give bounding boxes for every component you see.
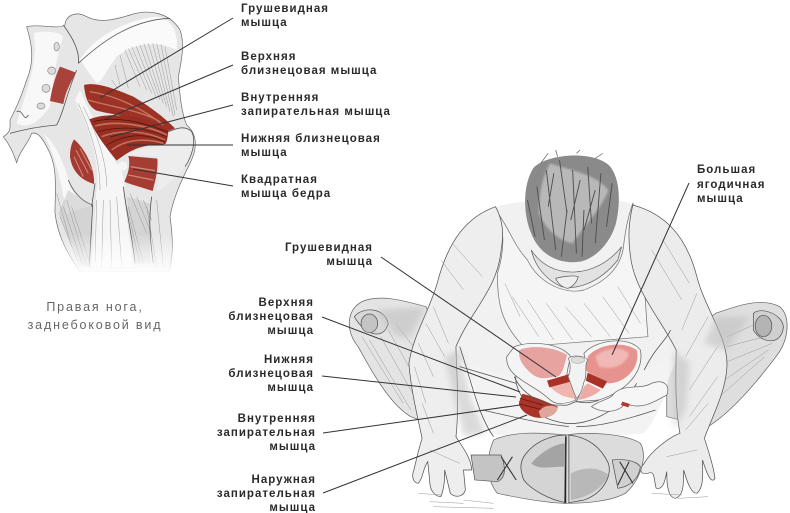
label: internal obturator, seated: запирательная	[217, 427, 316, 439]
caption	[28, 300, 162, 332]
label: quadratus femoris: мышца бедра	[241, 188, 331, 200]
label: internal obturator	[241, 92, 391, 118]
label: inferior gemellus: мышца	[241, 147, 288, 159]
label: internal obturator: Внутренняя	[241, 92, 319, 104]
muscle: lower pelvic fans	[550, 382, 576, 398]
gluteal hatching	[112, 43, 177, 117]
label: inferior gemellus, seated: Нижняя	[264, 354, 314, 366]
label: internal obturator, seated: Внутренняя	[238, 413, 316, 425]
bone: femur head	[127, 128, 194, 192]
leader lines: seated figure	[322, 183, 689, 493]
label: gluteus maximus: ягодичная	[697, 179, 766, 191]
sacrum and ilium light planes	[80, 17, 177, 83]
soft pencil shading	[377, 307, 750, 437]
crossed feet	[488, 433, 643, 503]
muscle: piriformis bands	[547, 374, 571, 387]
hair	[525, 156, 619, 262]
label: external obturator, seated	[217, 474, 316, 513]
muscle: gluteus and piriformis pelvis	[507, 341, 668, 418]
lap and waist	[471, 357, 669, 437]
label: superior gemellus: близнецовая мышца	[241, 65, 377, 77]
label: inferior gemellus	[241, 133, 381, 159]
sacral foramina	[37, 42, 59, 109]
caption: Правая нога,	[46, 300, 144, 314]
label: superior gemellus, seated: мышца	[267, 325, 314, 337]
muscle: left gluteus	[519, 347, 567, 378]
neck shadow	[531, 247, 622, 287]
fade	[50, 233, 183, 274]
label: superior gemellus, seated	[228, 297, 314, 337]
muscle: small right tendon	[621, 402, 630, 407]
muscle: piriformis	[84, 84, 175, 132]
tank top	[495, 203, 648, 347]
hip joint shape	[591, 382, 668, 411]
muscle: obturator blob	[519, 394, 558, 418]
leader lines: right leg view	[100, 18, 233, 186]
label: inferior gemellus, seated	[228, 354, 314, 394]
tendon sheet	[75, 90, 133, 267]
right arm	[629, 205, 727, 498]
thigh pencil shading	[58, 190, 150, 267]
sacrum	[568, 356, 588, 398]
torso	[448, 199, 686, 427]
left arm	[409, 207, 503, 497]
label: piriformis, seated: Грушевидная	[285, 242, 373, 254]
label: piriformis, seated: мышца	[326, 256, 373, 268]
floor shading	[418, 493, 708, 508]
illustration: right leg posterolateral view	[3, 12, 195, 274]
label: internal obturator, seated	[217, 413, 316, 453]
label: superior gemellus, seated: Верхняя	[259, 297, 314, 309]
label: inferior gemellus: Нижняя близнецовая	[241, 133, 381, 145]
label: piriformis, seated	[285, 242, 373, 268]
muscle: right gluteus	[586, 345, 637, 383]
label: superior gemellus: Верхняя	[241, 51, 296, 63]
label: superior gemellus	[241, 51, 377, 77]
label: gluteus maximus: Большая	[697, 164, 756, 176]
label: external obturator, seated: запирательная	[217, 488, 316, 500]
label: superior gemellus, seated: близнецовая	[228, 311, 314, 323]
pelvis and thigh silhouette	[3, 12, 195, 272]
label: quadratus femoris	[241, 174, 331, 200]
ligaments and outlines	[10, 18, 170, 133]
muscle: gluteal oval	[70, 139, 94, 184]
label: internal obturator, seated: мышца	[269, 441, 316, 453]
label: quadratus femoris: Квадратная	[241, 174, 318, 186]
label: external obturator, seated: Наружная	[252, 474, 316, 486]
label: gluteus maximus: мышца	[697, 193, 744, 205]
soles	[521, 435, 566, 503]
muscle: quadratus femoris	[124, 156, 158, 191]
label: gluteus maximus	[697, 164, 766, 205]
label: piriformis	[241, 3, 329, 29]
caption: заднебоковой вид	[28, 318, 162, 332]
muscle: obturator and gemelli group	[89, 115, 170, 161]
label: inferior gemellus, seated: близнецовая	[228, 368, 314, 380]
label: inferior gemellus, seated: мышца	[267, 382, 314, 394]
illustration: seated figure in butterfly pose	[349, 150, 787, 508]
left leg	[349, 298, 456, 433]
label: piriformis: Грушевидная	[241, 3, 329, 15]
label: internal obturator: запирательная мышца	[241, 106, 391, 118]
muscle: small piriformis origin	[50, 67, 76, 104]
label: piriformis: мышца	[241, 17, 288, 29]
right leg	[667, 302, 787, 427]
